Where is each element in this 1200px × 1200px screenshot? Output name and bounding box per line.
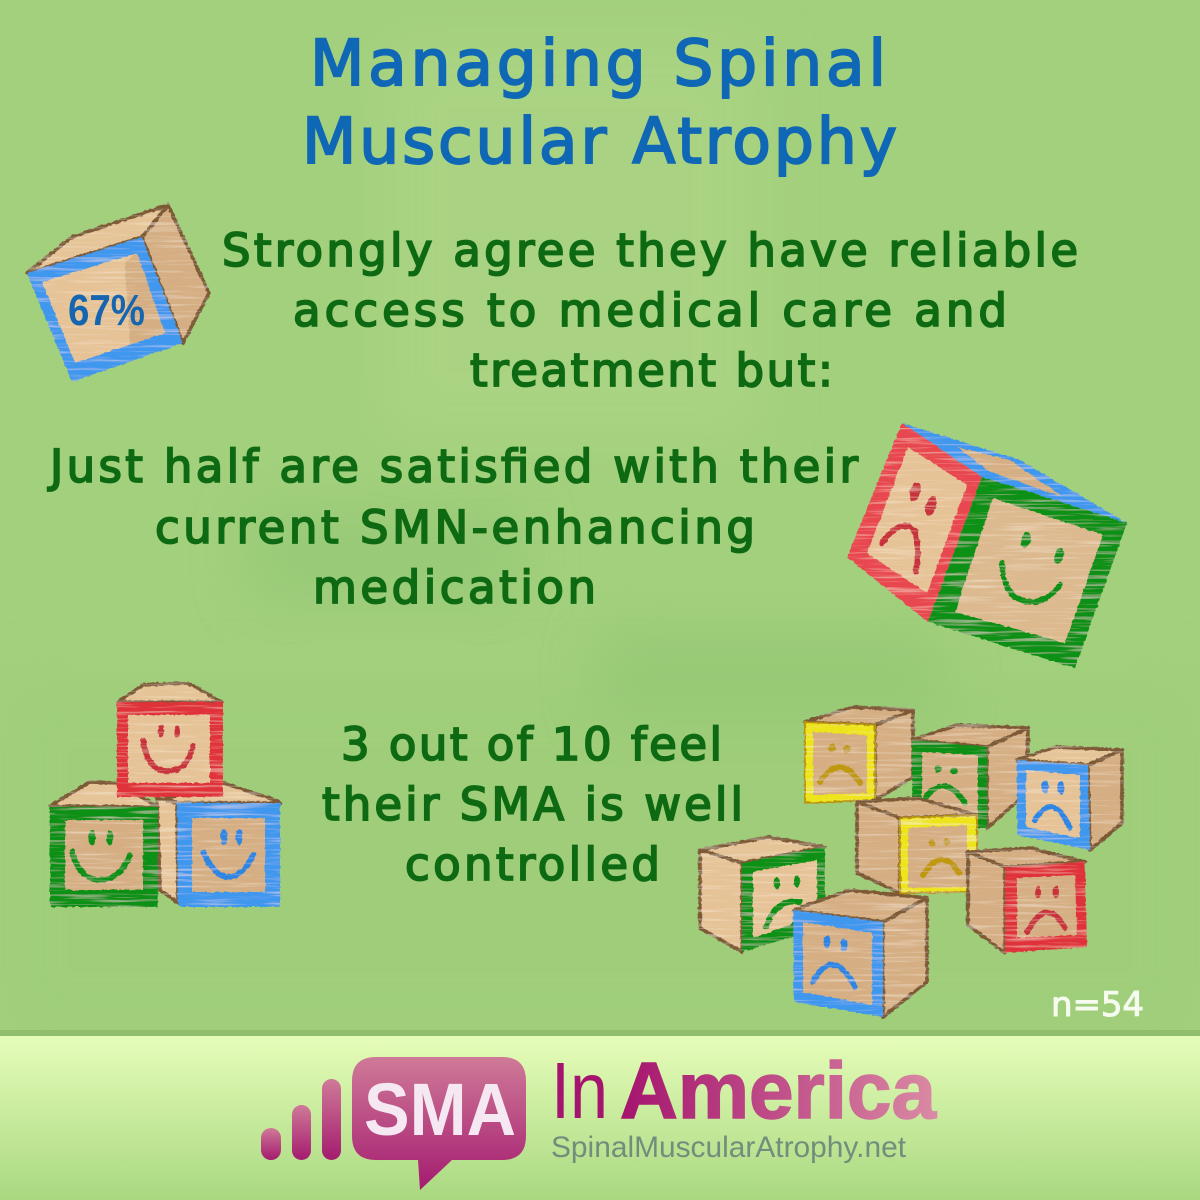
text block: reliable access: treatment but: [470,344,833,397]
logo text: website: SpinalMuscularAtrophy.net [551,1131,907,1164]
text block: reliable access [222,224,1078,397]
block: green sad left [700,837,825,952]
logo text: SMA: SMA [364,1068,516,1151]
icon: speech bubble [352,1057,526,1190]
icon: stack of happy blocks [50,683,280,907]
sample size note: n=54 [1051,985,1144,1025]
block: yellow sad center [857,798,977,893]
text block: well controlled [322,718,743,891]
icon: 67% block [27,205,209,382]
text block: well controlled: controlled [405,838,660,891]
icon: red and green mixed block [847,423,1127,668]
text block: satisfaction: medication [313,561,596,614]
title [302,27,897,178]
block: red happy [117,683,223,797]
logo text: In: In [551,1046,608,1135]
text block: reliable access: access to medical care and [293,284,1007,337]
block: blue happy [157,783,280,907]
title: Managing Spinal [310,27,886,100]
title: Muscular Atrophy [302,105,897,178]
block: yellow sad [805,707,913,803]
block: green happy [50,782,158,907]
block: blue sad top right [1017,747,1122,850]
icon: scattered sad blocks [700,707,1122,1017]
text block: reliable access: Strongly agree they have reliable [222,224,1078,277]
text block: satisfaction [47,440,858,614]
stat: 67%: 67% [68,286,145,335]
logo: SMA in America [261,1046,937,1190]
text block: well controlled: their SMA is well [322,778,743,831]
footer band [0,1036,1200,1200]
block: green sad [912,725,1028,830]
text block: well controlled: 3 out of 10 feel [341,718,722,771]
logo text: America: America [620,1046,937,1135]
block: red sad [968,848,1087,953]
block faces [27,205,209,382]
text block: satisfaction: Just half are satisfied with their [47,440,858,493]
icon: signal bars [261,1079,341,1160]
block: blue sad front [793,890,927,1017]
text block: satisfaction: current SMN-enhancing [155,501,755,554]
